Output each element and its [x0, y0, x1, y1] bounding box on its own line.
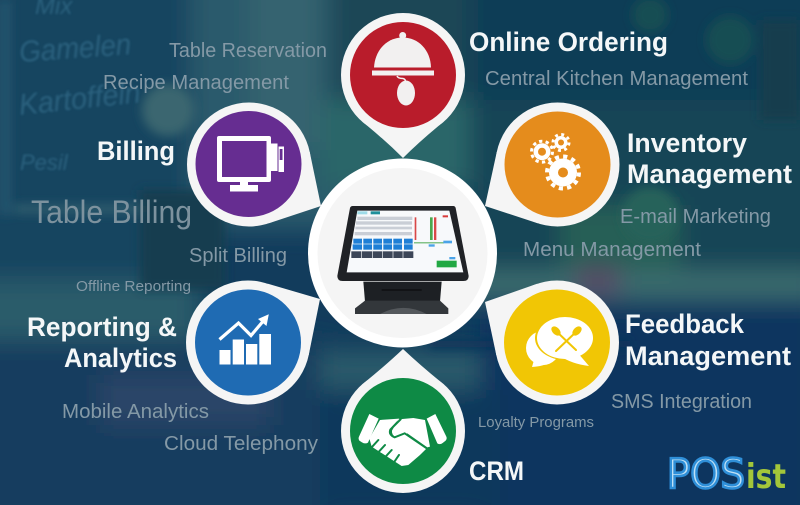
icon: handshake	[359, 414, 447, 466]
pin: feedback management	[485, 280, 619, 404]
pin: CRM	[341, 349, 465, 493]
POS terminal	[337, 206, 469, 314]
background: blurred cafe photo: Pesil	[20, 150, 69, 175]
label: sms integration: SMS Integration	[611, 391, 752, 413]
pin: billing	[187, 102, 321, 226]
heading: reporting and analytics: Reporting &	[27, 312, 177, 342]
heading: inventory management: Management	[627, 159, 792, 189]
label: loyalty programs: Loyalty Programs	[478, 414, 594, 431]
label: table reservation: Table Reservation	[169, 40, 327, 62]
heading: online ordering: Online Ordering	[469, 27, 668, 57]
label: e-mail marketing: E-mail Marketing	[620, 206, 771, 228]
label: cloud telephony: Cloud Telephony	[164, 433, 318, 455]
heading: feedback management: Feedback	[625, 309, 745, 339]
background: blurred cafe photo: Kartoffeln	[17, 76, 142, 122]
heading: feedback management: Management	[625, 341, 791, 371]
label: table billing: Table Billing	[31, 194, 192, 230]
icon: gears	[532, 134, 579, 188]
heading: inventory management: Inventory	[627, 128, 747, 158]
heading: CRM: CRM	[469, 456, 524, 486]
pin: inventory management	[485, 102, 620, 226]
heading: billing: Billing	[97, 136, 175, 166]
pin: online ordering	[341, 13, 465, 158]
heading: reporting and analytics: Analytics	[64, 343, 177, 373]
logo: POSist: ist	[746, 457, 786, 497]
icon: rising bar chart	[220, 314, 271, 364]
logo: POSist: POS	[667, 450, 745, 498]
icon: computer monitor	[217, 136, 284, 192]
label: menu management: Menu Management	[523, 239, 701, 261]
label: mobile analytics: Mobile Analytics	[62, 401, 209, 423]
icon: speech bubbles with spoon and fork	[526, 316, 595, 367]
pin: reporting and analytics	[186, 280, 320, 404]
label: recipe management: Recipe Management	[103, 72, 289, 94]
logo: POSist	[667, 450, 786, 498]
label: offline reporting: Offline Reporting	[76, 278, 191, 295]
label: central kitchen management: Central Kitchen Management	[485, 68, 748, 90]
icon: cloche and mouse	[372, 32, 434, 106]
background: blurred cafe photo: Gamelen	[18, 28, 132, 69]
label: split billing: Split Billing	[189, 245, 287, 267]
central device circle	[308, 158, 497, 348]
